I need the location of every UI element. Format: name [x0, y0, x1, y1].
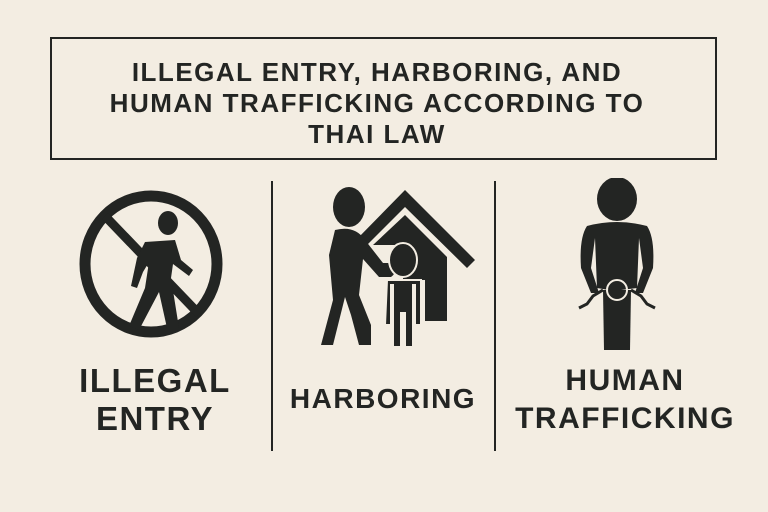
label: illegal entry: [79, 362, 231, 437]
title: ILLEGAL ENTRY, HARBORING, AND: [132, 57, 622, 87]
divider left: [271, 181, 273, 451]
label: human trafficking: [515, 364, 735, 435]
label: human trafficking: TRAFFICKING: [515, 402, 735, 435]
label: harboring: HARBORING: [290, 383, 476, 414]
title box: [50, 37, 717, 160]
divider right: [494, 181, 496, 451]
icon: harboring: [321, 187, 475, 346]
label: human trafficking: HUMAN: [565, 364, 685, 397]
icon: trafficked person: [578, 178, 656, 350]
icon: no entry walker: [80, 190, 222, 338]
label: illegal entry: ILLEGAL: [79, 362, 231, 399]
title: [110, 57, 644, 149]
title: THAI LAW: [308, 119, 446, 149]
label: illegal entry: ENTRY: [96, 400, 214, 437]
title: HUMAN TRAFFICKING ACCORDING TO: [110, 88, 644, 118]
